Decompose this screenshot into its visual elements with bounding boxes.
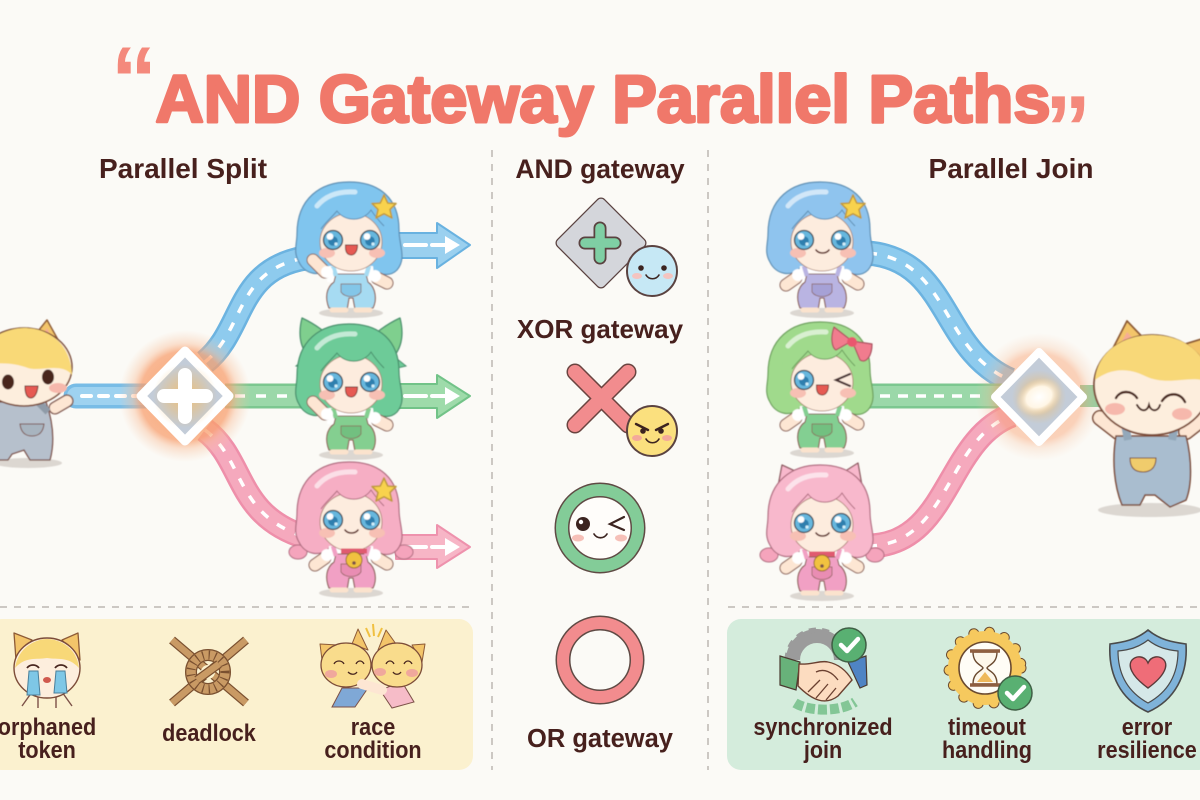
label: OR gateway: OR gateway <box>527 725 674 753</box>
label: error resilience: resilience <box>1097 736 1197 763</box>
character: pink girl with star and bell, split <box>289 462 413 598</box>
road: blue join path <box>868 253 1010 380</box>
road: pink split path <box>205 430 305 537</box>
title: „ <box>1045 26 1091 128</box>
label: timeout handling: handling <box>942 736 1032 763</box>
icon: crying cat, orphaned token <box>14 633 80 708</box>
label: race condition: condition <box>324 736 422 763</box>
title <box>111 26 1091 137</box>
road: pink join path <box>868 415 1012 546</box>
label: deadlock: deadlock <box>162 719 256 746</box>
label: synchronized join: join <box>803 736 842 763</box>
arrow: green output <box>396 375 470 418</box>
road: blue split path <box>205 258 305 362</box>
character: blue girl, join <box>767 182 873 318</box>
label: error resilience: error <box>1122 713 1172 740</box>
gateway legend column <box>515 154 685 753</box>
title: AND Gateway Parallel Paths <box>156 62 1050 137</box>
character: green girl with bow, split <box>296 318 406 460</box>
label: race condition: race <box>351 713 395 740</box>
arrow: blue output <box>396 223 470 268</box>
label: XOR gateway: XOR gateway <box>517 314 684 344</box>
road: green split path <box>225 384 310 408</box>
label: timeout handling: timeout <box>948 713 1026 740</box>
panel: best practices <box>727 619 1200 770</box>
character: pink cat-eared girl with bell, join <box>760 463 884 601</box>
icon: handshake with gear and check <box>780 628 867 710</box>
icon: rope knot, deadlock <box>172 640 246 703</box>
left flow: incoming road <box>76 384 150 408</box>
join gateway: glowing merged diamond <box>975 333 1103 461</box>
label: synchronized join: synchronized <box>753 713 893 740</box>
heading: parallel split: Parallel Split <box>99 153 267 184</box>
character: blue girl with star, split <box>296 182 402 318</box>
heading: parallel join: Parallel Join <box>929 153 1093 184</box>
character: happy yellow cat, right <box>1094 321 1200 517</box>
icon: XOR cross with mischievous face <box>575 372 677 456</box>
icon: hourglass badge with check <box>949 632 1032 710</box>
label: orphaned token: orphaned <box>0 713 96 740</box>
icon: two cats colliding, race condition <box>320 624 425 708</box>
icon: red OR ring <box>563 623 637 697</box>
title: “ <box>111 29 157 131</box>
label: orphaned token: token <box>18 736 76 763</box>
road: green join path <box>868 384 1105 408</box>
character: yellow cat, left <box>0 320 72 468</box>
split gateway: glowing plus diamond <box>119 330 251 462</box>
icon: AND gateway diamond with smiling face <box>561 203 677 296</box>
arrow: pink output <box>396 525 470 568</box>
character: green girl winking with bow, join <box>767 322 873 458</box>
label: AND gateway: AND gateway <box>515 154 685 184</box>
icon: green ring with winking face <box>562 490 638 566</box>
icon: shield with heart <box>1110 630 1186 712</box>
panel: pitfalls <box>0 619 473 770</box>
